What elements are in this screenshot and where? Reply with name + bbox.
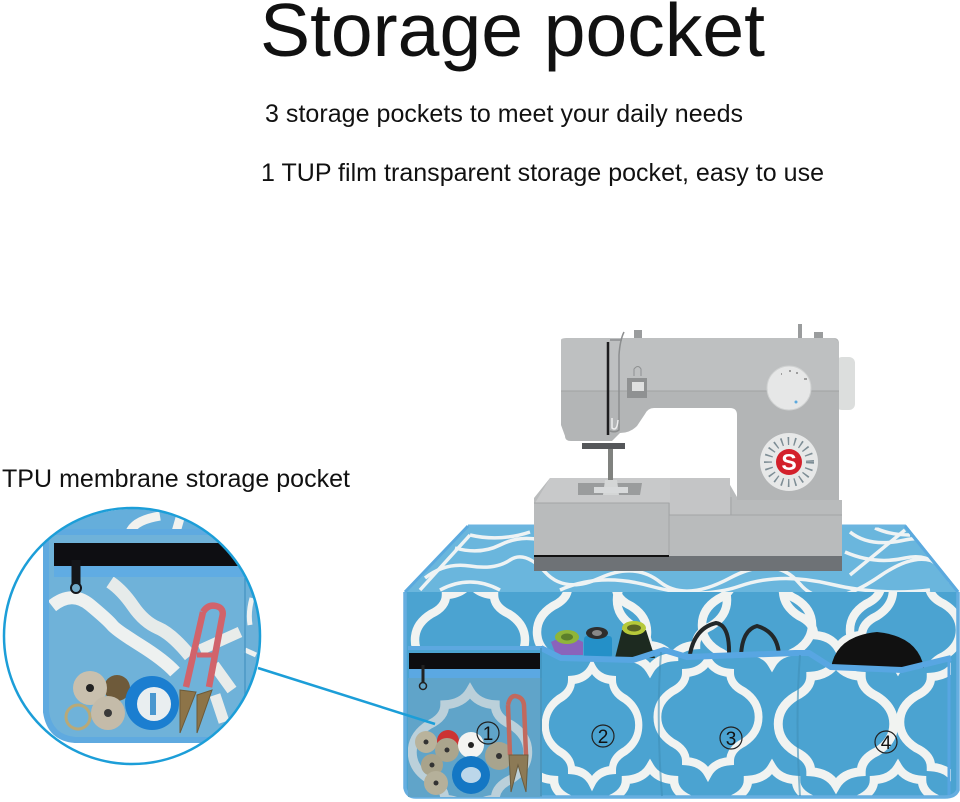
label: TPU membrane: TPU membrane storage pocket: [2, 465, 350, 493]
pocket number 2: 2: [598, 727, 608, 748]
pockets 2-4 trim: [541, 648, 951, 796]
pocket contents: scissors: [690, 623, 779, 656]
bobbins: [415, 730, 513, 795]
magnified detail circle: [4, 505, 265, 764]
fabric above pocket: [64, 509, 200, 529]
bobbins and measuring tape: [66, 671, 179, 730]
callout line: [258, 668, 435, 724]
lever: [627, 378, 647, 398]
zipper: [54, 543, 244, 566]
thread snips: [508, 696, 528, 792]
cover top surface: [405, 526, 958, 597]
sewing machine: [534, 324, 855, 571]
text: transparent pocket: 1 TUP film transparent storage pocket, easy to use: [261, 159, 824, 187]
pocket contents: black roll: [831, 632, 924, 668]
hand wheel: [836, 357, 855, 410]
pocket number 4: 4: [881, 733, 892, 754]
pattern dial: [760, 433, 818, 491]
thread snips: [180, 606, 223, 733]
pocket number 1: [477, 722, 499, 745]
pocket trim: [43, 529, 208, 743]
storage cover: [405, 526, 960, 802]
text: storage pockets: 3 storage pockets to meet your daily needs: [265, 100, 743, 128]
pocket fabric: [541, 648, 951, 797]
pattern dial: S: [781, 449, 797, 475]
pocket number 2: [592, 725, 614, 748]
machine head and column: [561, 338, 839, 500]
pocket number 3: [720, 727, 742, 750]
pocket number 1: 1: [483, 724, 493, 745]
needle and presser foot: [582, 446, 628, 495]
pocket 1: transparent zip: [408, 646, 542, 802]
thread guide: [607, 342, 609, 435]
machine base: [534, 478, 842, 556]
cover front panel: [405, 526, 960, 799]
pocket background: [46, 532, 265, 742]
pocket number 4: [875, 731, 897, 754]
stitch length dial: [767, 366, 811, 410]
pocket contents: thread spools: [551, 621, 655, 658]
pocket number 3: 3: [726, 729, 736, 750]
top pins: [634, 324, 823, 340]
